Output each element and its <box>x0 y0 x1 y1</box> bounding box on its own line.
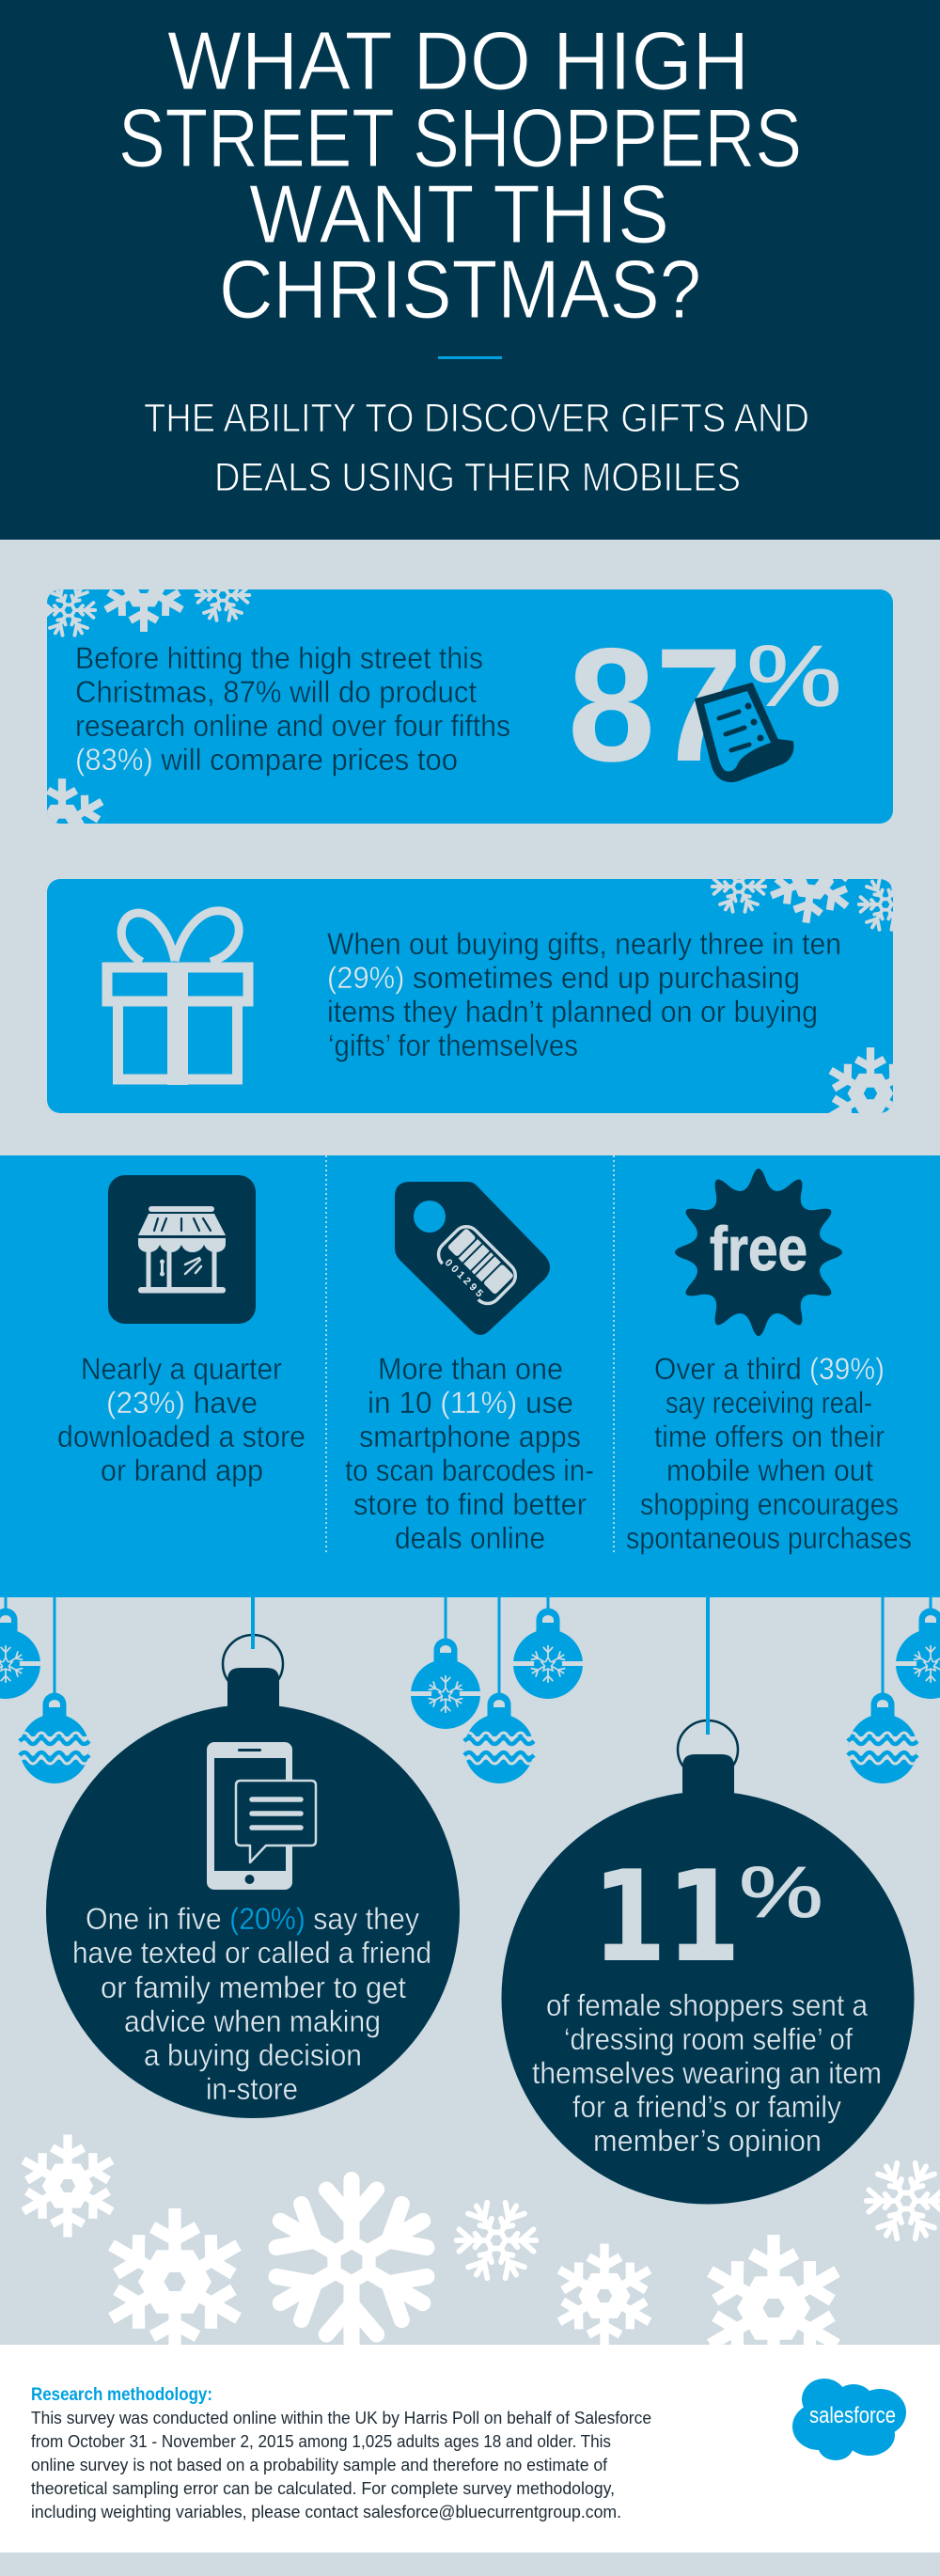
87 percent figure: % <box>746 626 842 727</box>
panel: product research <box>47 589 893 824</box>
text: real-time offers: Over a third (39%) <box>654 1352 885 1386</box>
research text: (83%) will compare prices too <box>75 743 458 777</box>
text: store apps: or brand app <box>101 1453 263 1487</box>
panel: impulse gifts <box>47 879 893 1113</box>
text: store apps: downloaded a store <box>57 1420 306 1453</box>
text: barcode scanning: to scan barcodes in- <box>345 1453 594 1487</box>
logo: salesforce cloud: salesforce <box>809 2403 896 2428</box>
bauble text: have texted or called a friend <box>72 1936 431 1970</box>
text: real-time offers: say receiving real- <box>666 1386 872 1420</box>
text: barcode scanning: smartphone apps <box>359 1420 581 1453</box>
bauble text <box>72 1902 431 2106</box>
bauble text: themselves wearing an item <box>532 2056 882 2090</box>
panel snowflakes <box>47 589 252 824</box>
research methodology text: theoretical sampling error can be calculated. For complete survey methodology, <box>31 2478 615 2498</box>
text: real-time offers: time offers on their <box>654 1420 885 1453</box>
subtitle: DEALS USING THEIR MOBILES <box>214 455 741 500</box>
title: WHAT DO HIGH <box>167 14 749 107</box>
gift text: When out buying gifts, nearly three in ten <box>327 927 841 961</box>
bauble text: for a friend’s or family <box>572 2090 841 2124</box>
panel snowflakes <box>711 879 893 1113</box>
title: CHRISTMAS? <box>219 243 701 336</box>
text: store apps <box>57 1352 306 1487</box>
research text: Christmas, 87% will do product <box>75 675 477 709</box>
research methodology text: online survey is not based on a probability sample and therefore no estimate of <box>31 2455 608 2474</box>
icon: phone with chat bubble <box>207 1742 316 1890</box>
text: barcode scanning: deals online <box>395 1521 545 1555</box>
bauble text: of female shoppers sent a <box>546 1988 868 2022</box>
title <box>118 14 802 336</box>
bauble text: ‘dressing room selfie’ of <box>564 2022 853 2056</box>
white snowflakes <box>21 2134 940 2345</box>
research text: research online and over four fifths <box>75 709 510 743</box>
title: WANT THIS <box>249 167 669 260</box>
text: real-time offers <box>626 1352 912 1555</box>
gift text: items they hadn’t planned on or buying <box>327 995 818 1029</box>
header panel <box>0 0 940 540</box>
title: STREET SHOPPERS <box>118 91 802 184</box>
text: barcode scanning: More than one <box>378 1352 563 1386</box>
small hanging baubles <box>0 1597 940 1783</box>
icon: barcode price tag: 001295 <box>443 1257 485 1299</box>
bauble text: in-store <box>206 2072 298 2106</box>
subtitle <box>144 396 809 500</box>
text: barcode scanning: store to find better <box>353 1487 587 1521</box>
gift text: (29%) sometimes end up purchasing <box>327 961 800 995</box>
gift text <box>327 927 841 1062</box>
bauble: dressing room selfie <box>502 1597 914 2204</box>
panel: mobile statistics band <box>0 1155 940 1597</box>
text: barcode scanning <box>345 1352 594 1555</box>
11 percent figure: % <box>739 1850 823 1934</box>
research methodology heading: Research methodology: <box>31 2385 212 2405</box>
11 percent figure: 11 <box>592 1844 741 1990</box>
bauble text <box>532 1988 882 2158</box>
text: real-time offers: mobile when out <box>666 1453 873 1487</box>
logo: salesforce cloud <box>792 2379 906 2460</box>
icon: receipt <box>696 683 792 781</box>
research methodology text: including weighting variables, please contact salesforce@bluecurrentgroup.com. <box>31 2502 621 2521</box>
title divider <box>438 356 502 359</box>
text: store apps: (23%) have <box>106 1386 258 1420</box>
footer panel <box>0 2345 940 2552</box>
text: store apps: Nearly a quarter <box>81 1352 282 1386</box>
bauble text: member’s opinion <box>593 2124 822 2158</box>
research text: Before hitting the high street this <box>75 641 483 675</box>
gift text: ‘gifts’ for themselves <box>328 1029 578 1062</box>
text: real-time offers: shopping encourages <box>640 1487 899 1521</box>
research methodology text: from October 31 - November 2, 2015 among 1,025 adults ages 18 and older. This <box>31 2431 611 2451</box>
icon: free badge <box>675 1169 842 1336</box>
text: real-time offers: spontaneous purchases <box>626 1521 912 1555</box>
bauble text: advice when making <box>124 2004 381 2038</box>
subtitle: THE ABILITY TO DISCOVER GIFTS AND <box>144 396 809 441</box>
bauble text: One in five (20%) say they <box>86 1902 419 1936</box>
text: barcode scanning: in 10 (11%) use <box>368 1386 573 1420</box>
research methodology text <box>31 2408 651 2521</box>
bauble text: a buying decision <box>144 2038 362 2072</box>
bauble text: or family member to get <box>101 1971 406 2004</box>
icon: free badge: free <box>710 1214 807 1283</box>
87 percent figure: 87 <box>568 615 743 795</box>
icon: barcode price tag <box>395 1182 550 1335</box>
icon: gift box <box>107 911 248 1085</box>
research methodology text: This survey was conducted online within the UK by Harris Poll on behalf of Salesforce <box>31 2408 651 2427</box>
icon: shop front <box>108 1175 256 1324</box>
bauble: one in five <box>46 1597 460 2118</box>
research text <box>75 641 510 777</box>
87 percent figure <box>568 615 842 795</box>
